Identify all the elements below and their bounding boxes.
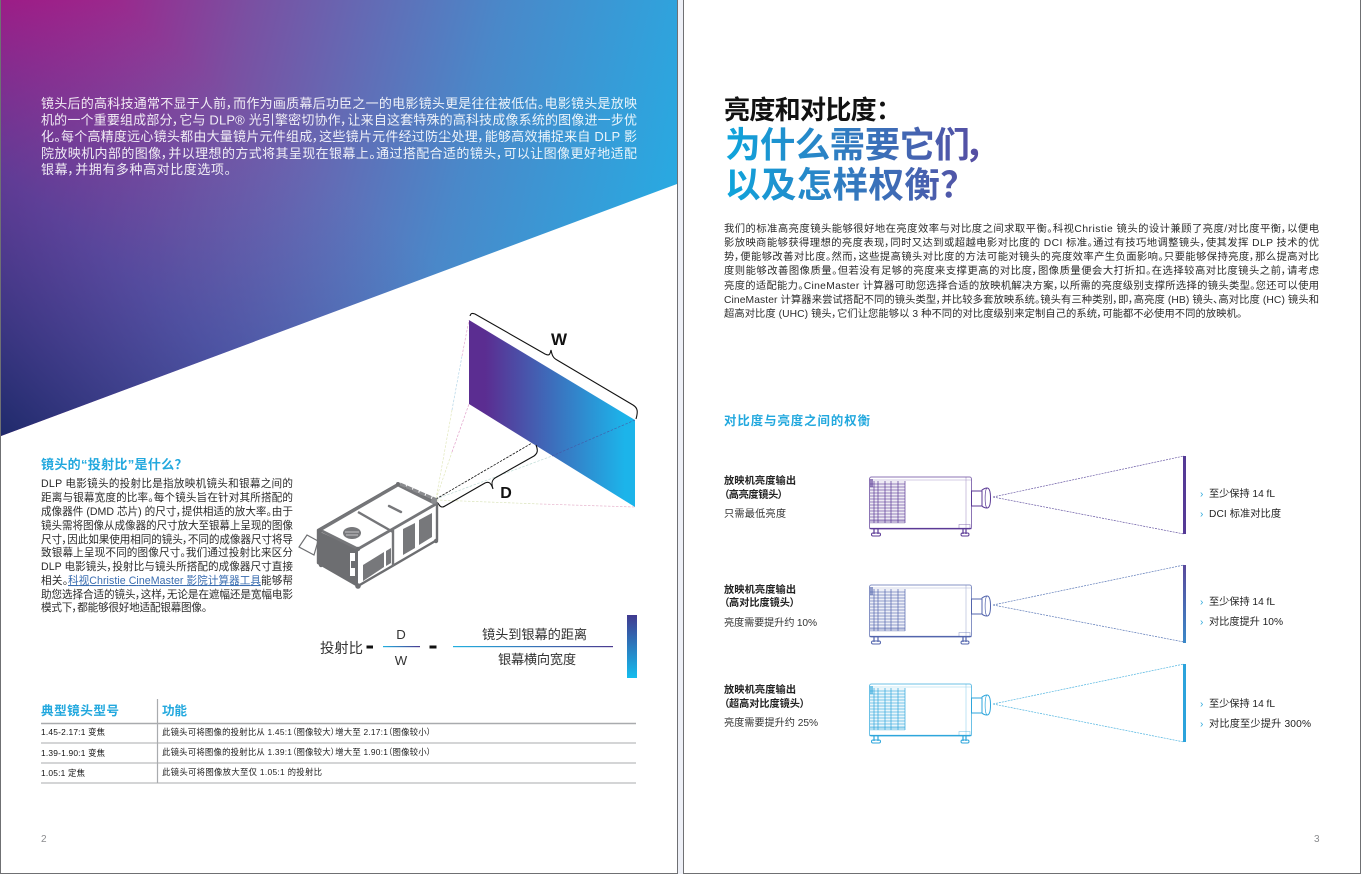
title: 亮度和对比度： bbox=[724, 95, 889, 125]
intro paragraph bbox=[41, 96, 637, 177]
intro paragraph: 银幕，并拥有多种高对比度选项。 bbox=[41, 162, 231, 177]
row: ultra high contrast lens: （超高对比度镜头） bbox=[724, 697, 805, 710]
intro paragraph: 化。每个高精度远心镜头都由大量镜片元件组成，这些镜片元件经过防尘处理，能够高效捕捉来自 DLP 影 bbox=[41, 129, 637, 144]
row: high brightness lens: （高亮度镜头） bbox=[724, 488, 783, 501]
paragraph: balance: 我们的标准高亮度镜头能够很好地在亮度效率与对比度之间求取平衡。科视Christie 镜头的设计兼顾了亮度/对比度平衡，以便电 bbox=[724, 222, 1319, 235]
row: high contrast lens: › bbox=[1200, 597, 1203, 608]
label W: W bbox=[551, 330, 568, 349]
paragraph: balance: 超高对比度 (UHC) 镜头，它们让您能够以 3 种不同的对比度级别来定制自己的系统，可能都不必使用不同的放映机。 bbox=[724, 307, 1242, 320]
paragraph: balance: 势，便能够改善对比度。然而，这些提高镜头对比度的方法可能对镜头的亮度效率产生负面影响。只要能够保持亮度，那么提高对比 bbox=[724, 250, 1319, 263]
throw ratio paragraph: DLP 电影镜头的投射比是指放映机镜头和银幕之间的 bbox=[41, 477, 293, 490]
formula: throw ratio bbox=[320, 626, 613, 668]
row: high brightness lens: › bbox=[1200, 509, 1203, 520]
table rows: 1.45-2.17:1 变焦 bbox=[41, 727, 106, 737]
row: ultra high contrast lens: 放映机亮度输出 bbox=[724, 683, 796, 696]
table header: 功能 bbox=[162, 703, 187, 718]
panel: left page bbox=[0, 0, 678, 874]
paragraph: balance bbox=[724, 222, 1319, 320]
throw ratio paragraph: 科视Christie CineMaster 影院计算器工具 bbox=[68, 574, 261, 587]
title: 为什么需要它们， bbox=[725, 125, 987, 165]
row: high brightness lens: 放映机亮度输出 bbox=[724, 474, 796, 487]
row: ultra high contrast lens: 对比度至少提升 300% bbox=[1209, 717, 1311, 730]
row: high contrast lens: 至少保持 14 fL bbox=[1209, 595, 1275, 608]
projection rays bbox=[436, 320, 635, 507]
table: lens types bbox=[41, 699, 636, 783]
title bbox=[724, 95, 987, 205]
diagram: projector throw bbox=[299, 313, 637, 589]
row: ultra high contrast lens bbox=[724, 664, 1311, 743]
intro paragraph: 镜头后的高科技通常不显于人前，而作为画质幕后功臣之一的电影镜头更是往往被低估。电影镜头是放映 bbox=[41, 96, 637, 111]
row: high brightness lens: 只需最低亮度 bbox=[724, 507, 786, 520]
row: ultra high contrast lens: 亮度需要提升约 25% bbox=[724, 716, 818, 729]
gradient banner bbox=[1, 0, 677, 436]
table rows: 1.05:1 定焦 bbox=[41, 768, 86, 778]
formula: throw ratio: 银幕横向宽度 bbox=[498, 651, 576, 667]
title: 以及怎样权衡？ bbox=[725, 165, 958, 205]
throw ratio paragraph: 相关。 bbox=[41, 574, 68, 587]
row: high contrast lens: 亮度需要提升约 10% bbox=[724, 616, 817, 629]
throw ratio paragraph: 尺寸，因此如果使用相同的镜头，不同的成像器尺寸将导 bbox=[41, 533, 293, 546]
intro paragraph: 院放映机内部的图像，并以理想的方式将其呈现在银幕上。通过搭配合适的镜头，可以让图像更好地适配 bbox=[41, 146, 637, 161]
throw ratio paragraph: 距离与银幕宽度的比率。每个镜头旨在针对其所搭配的 bbox=[41, 491, 293, 504]
brace W bbox=[470, 313, 637, 419]
panel: right page bbox=[683, 0, 1361, 874]
intro paragraph: 机的一个重要组成部分，它与 DLP® 光引擎密切协作，让来自这套特殊的高科技成像系统的图像进一步优 bbox=[41, 112, 637, 128]
paragraph: balance: 度则能够改善图像质量。但若没有足够的亮度来支撑更高的对比度，图像质量便会大打折扣。在选择较高对比度镜头之前，请考虑 bbox=[724, 264, 1319, 277]
table header bbox=[41, 703, 187, 718]
projector bbox=[299, 482, 438, 589]
row: high contrast lens: › bbox=[1200, 617, 1203, 628]
row: high contrast lens bbox=[724, 565, 1283, 644]
throw ratio paragraph: 成像器件 (DMD 芯片) 的尺寸，提供相适的放大率。由于 bbox=[41, 505, 293, 518]
page number 2: 2 bbox=[41, 834, 47, 845]
formula: throw ratio: W bbox=[395, 653, 408, 668]
paragraph: balance: 影放映商能够获得理想的亮度表现，同时又达到或超越电影对比度的 DCI 标准。通过有技巧地调整镜头，使其发挥 DLP 技术的优 bbox=[724, 236, 1319, 249]
row: ultra high contrast lens: › bbox=[1200, 699, 1203, 710]
throw ratio paragraph: 能够帮 bbox=[261, 574, 293, 587]
row: high contrast lens: 放映机亮度输出 bbox=[724, 583, 796, 596]
table rows: 1.39-1.90:1 变焦 bbox=[41, 748, 106, 758]
brace D bbox=[438, 445, 537, 507]
throw ratio paragraph bbox=[41, 477, 293, 614]
row: ultra high contrast lens: 至少保持 14 fL bbox=[1209, 697, 1275, 710]
row: high brightness lens: DCI 标准对比度 bbox=[1209, 507, 1281, 520]
table rows: 此镜头可将图像的投射比从 1.45:1（图像较大）增大至 2.17:1（图像较小） bbox=[162, 727, 431, 737]
formula: throw ratio: 投射比 bbox=[320, 640, 363, 657]
row: high contrast lens: 对比度提升 10% bbox=[1209, 615, 1283, 628]
table rows: 此镜头可将图像的投射比从 1.39:1（图像较大）增大至 1.90:1（图像较小） bbox=[162, 747, 431, 757]
table header: 典型镜头型号 bbox=[41, 703, 119, 718]
formula: throw ratio: D bbox=[396, 627, 406, 642]
heading: what is throw ratio: 镜头的“投射比”是什么？ bbox=[41, 457, 181, 472]
throw ratio paragraph: 助您选择合适的镜头，这样，无论是在遮幅还是宽幅电影 bbox=[41, 588, 293, 601]
heading: tradeoff: 对比度与亮度之间的权衡 bbox=[724, 413, 870, 428]
formula: throw ratio: 镜头到银幕的距离 bbox=[482, 626, 587, 642]
throw ratio paragraph: 致银幕上呈现不同的图像尺寸。我们通过投射比来区分 bbox=[41, 546, 293, 559]
row: high contrast lens: （高对比度镜头） bbox=[724, 596, 795, 609]
color bar bbox=[627, 615, 637, 678]
page number 3: 3 bbox=[1314, 834, 1320, 845]
row: high brightness lens bbox=[724, 456, 1281, 536]
row: high brightness lens: 至少保持 14 fL bbox=[1209, 487, 1275, 500]
row: high brightness lens: › bbox=[1200, 489, 1203, 500]
paragraph: balance: CineMaster 计算器来尝试搭配不同的镜头类型，并比较多套放映系统。镜头有三种类别，即，高亮度 (HB) 镜头、高对比度 (HC) 镜头和 bbox=[724, 293, 1319, 306]
table rows: 此镜头可将图像放大至仅 1.05:1 的投射比 bbox=[162, 767, 322, 777]
throw ratio paragraph: 模式下，都能够很好地适配银幕图像。 bbox=[41, 601, 207, 614]
projected screen bbox=[469, 320, 635, 507]
table rows bbox=[41, 727, 431, 778]
label D: D bbox=[500, 485, 512, 502]
throw ratio paragraph: DLP 电影镜头，投射比与镜头所搭配的成像器尺寸直接 bbox=[41, 560, 293, 573]
throw ratio paragraph: 镜头需将图像从成像器的尺寸放大至银幕上呈现的图像 bbox=[41, 519, 293, 532]
row: ultra high contrast lens: › bbox=[1200, 719, 1203, 730]
paragraph: balance: 亮度的适配能力。CineMaster 计算器可助您选择合适的放映机解决方案，以所需的亮度级别支撑所选择的镜头类型。您还可以使用 bbox=[724, 279, 1319, 292]
